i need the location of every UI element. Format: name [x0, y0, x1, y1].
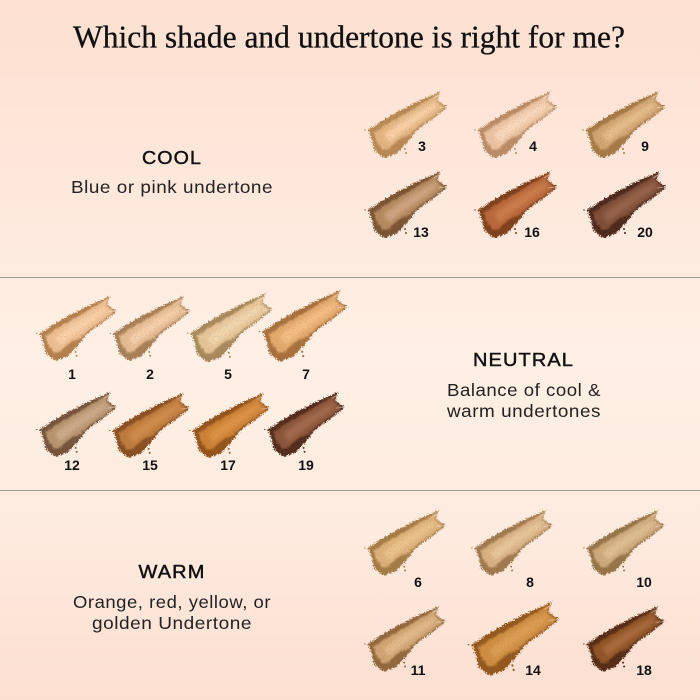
- swatch 13: 13: [413, 224, 429, 240]
- swatch 15: 15: [142, 457, 158, 473]
- swatch 1: [36, 296, 116, 382]
- swatch 12: 12: [64, 457, 80, 473]
- heading: neutral: NEUTRAL: [473, 350, 574, 370]
- swatch 3: [364, 91, 447, 158]
- swatch 1: 1: [68, 366, 76, 382]
- swatch 10: 10: [636, 574, 652, 590]
- swatch 8: [471, 510, 552, 590]
- swatch 15: [109, 393, 189, 473]
- swatch 18: 18: [636, 662, 652, 678]
- swatch 14: 14: [525, 662, 541, 678]
- swatch 7: [259, 290, 347, 382]
- swatch 11: 11: [411, 662, 426, 678]
- swatch 2: [110, 296, 190, 382]
- description: cool: Blue or pink undertone: [71, 177, 273, 197]
- swatch 18: [583, 606, 664, 678]
- swatch 7: 7: [302, 366, 310, 382]
- swatch 8: 8: [526, 574, 534, 590]
- swatch 3: 3: [418, 138, 426, 154]
- swatch 9: [582, 91, 665, 158]
- heading: cool: COOL: [142, 148, 202, 168]
- swatch 19: 19: [298, 457, 314, 473]
- swatch 9: 9: [641, 138, 649, 154]
- description: neutral: Balance of cool &: [447, 380, 601, 400]
- swatch 19: [264, 392, 344, 473]
- swatch 10: [583, 510, 664, 590]
- swatch 6: [364, 510, 445, 590]
- swatch 14: [468, 602, 559, 678]
- description: warm: Orange, red, yellow, or: [73, 592, 271, 612]
- swatch 16: 16: [524, 224, 540, 240]
- swatch 2: 2: [146, 366, 154, 382]
- panel: cool: [71, 91, 666, 240]
- panel: warm: [73, 510, 664, 678]
- swatch 20: [583, 171, 666, 240]
- title: Which shade and undertone is right for me?: [73, 18, 625, 54]
- swatch 4: 4: [529, 138, 537, 154]
- swatch 5: 5: [224, 366, 232, 382]
- description: neutral: warm undertones: [446, 401, 601, 421]
- swatch 11: [364, 606, 445, 678]
- swatch 17: 17: [220, 457, 236, 473]
- swatch 6: 6: [414, 574, 422, 590]
- heading: warm: WARM: [138, 562, 206, 582]
- panel: neutral: [36, 290, 601, 473]
- swatch 5: [187, 293, 272, 382]
- swatch 17: [189, 393, 269, 473]
- swatch 12: [36, 392, 116, 473]
- description: warm: golden Undertone: [92, 613, 252, 633]
- swatch 20: 20: [637, 224, 653, 240]
- swatch 4: [474, 91, 557, 158]
- swatch 13: [364, 171, 447, 240]
- swatch 16: [474, 171, 557, 240]
